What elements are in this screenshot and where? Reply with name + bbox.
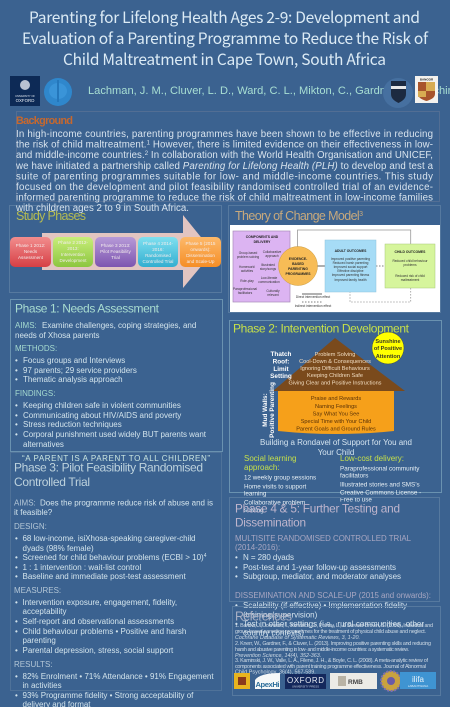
heading: phase 2: Phase 2: Intervention Development: [233, 322, 410, 336]
dissemination: •: [235, 601, 238, 610]
mud walls: Special Time with Your Child: [301, 419, 371, 425]
measures: [14, 586, 186, 655]
components box: Role-play: [240, 279, 254, 283]
methods: 97 parents; 29 service providers: [23, 366, 137, 375]
logo: yellow emblem: [234, 673, 250, 689]
design: [14, 522, 207, 581]
multisite trial: •: [235, 563, 238, 572]
phase 4: Controlled Trial: [143, 259, 173, 264]
components box: Homework/: [239, 265, 255, 269]
measures: Parental depression, stress, social support: [22, 646, 174, 655]
logo: ApexHi: ApexHi: [256, 680, 280, 689]
diagram legend: Direct intervention effect: [296, 295, 330, 299]
logo: Oxford University Press: [285, 674, 326, 689]
methods: [15, 344, 137, 384]
components box: approach: [265, 254, 279, 258]
logo: ilifa labantwana: LABANTWANA: [408, 684, 428, 688]
background text: However, there is limited evidence on their effectiveness in low-: [150, 140, 433, 150]
aims: AIMS: Does the programme reduce risk of abuse and is: [14, 498, 213, 508]
components box: Low-literate: [261, 276, 277, 280]
diagram: theory of change: [230, 225, 440, 312]
panel: phase 2 intervention development: [230, 320, 442, 504]
phase 1: Assessment: [18, 255, 44, 260]
measures: •: [15, 598, 18, 607]
components box: relevant: [267, 293, 279, 297]
low-cost delivery: Illustrated stories and SMS’s: [340, 482, 420, 488]
methods: METHODS:: [15, 344, 57, 353]
components box: COMPONENTS AND: [246, 235, 279, 239]
design: 4: [204, 553, 207, 559]
heading: phase 3: [14, 460, 203, 489]
background text: suite of parenting programmes suitable for low- and middle-income countries. This study: [16, 172, 433, 182]
heading: theory of change: 3: [359, 211, 363, 218]
heading: study phases: Study Phases: [16, 209, 86, 223]
heading: phase 3: Phase 3: Pilot Feasibility Randomised: [14, 460, 203, 474]
caption: Your Child: [318, 448, 354, 457]
phase 2: 2013:: [67, 246, 79, 251]
components box: Collaborative: [263, 250, 282, 254]
measures: MEASURES:: [14, 586, 61, 595]
social learning approach: learning: [244, 490, 267, 498]
thatch roof label: Roof:: [273, 358, 289, 366]
overlapped social learning text: Collaborative problem: [244, 500, 305, 506]
phase 3: [95, 237, 136, 267]
mud walls label: [262, 382, 276, 438]
multisite trial: (2014-2016):: [235, 543, 280, 552]
social learning approach: [244, 454, 316, 498]
thatch roof label: [270, 351, 292, 380]
child outcomes box: Reduced child behaviour: [392, 259, 428, 263]
background text: [15, 129, 434, 214]
mud walls label: Mud Walls:: [262, 393, 269, 427]
logo: Oxford University Press: UNIVERSITY PRESS: [292, 684, 319, 688]
panel: theory of change: [228, 206, 440, 312]
phase 4: [138, 237, 178, 267]
heading: phase 4 and 5: Phase 4 & 5: Further Testing and: [235, 502, 400, 516]
social learning approach: Home visits to support: [244, 484, 307, 490]
components box: problem solving: [237, 255, 259, 259]
phase 3: Trial: [111, 255, 120, 260]
reference list: group-based parenting programmes for the treatment of physical child abuse and neglect.: [235, 629, 426, 635]
phase 5: Dissemination: [186, 253, 215, 258]
quote: “A PARENT IS A PARENT TO ALL CHILDREN”: [22, 454, 210, 463]
measures: acceptability: [22, 607, 67, 616]
sunshine: [372, 332, 404, 364]
thatch roof label: Limit: [273, 366, 290, 373]
findings: [15, 389, 207, 449]
design: •: [15, 572, 18, 581]
phase 1: Phase 1 2012:: [16, 243, 45, 248]
logo: Bangor University: [415, 76, 438, 103]
components box: Group-based: [239, 251, 258, 255]
findings: •: [15, 401, 18, 410]
findings: •: [15, 411, 18, 420]
results: in activities: [22, 681, 62, 690]
evidence-based programmes circle: PROGRAMMES: [285, 272, 311, 276]
thatch roof: Giving Clear and Positive Instructions: [289, 380, 382, 386]
components box: Culturally: [266, 289, 280, 293]
heading: phase 4 and 5: Dissemination: [235, 516, 306, 530]
findings: Stress reduction techniques: [23, 420, 122, 429]
aims: needs of Xhosa parents: [15, 331, 100, 340]
background text: with children ages 2 to 9 in South Africa.: [15, 203, 189, 214]
components box: DELIVERY: [254, 240, 271, 244]
mud walls: Praise and Rewards: [311, 396, 361, 402]
panel: phase 1 needs assessment: [10, 300, 222, 452]
thatch roof: Cool-Down & Consequences: [299, 359, 371, 365]
panel: study phases: [10, 206, 222, 292]
overlapped social learning text: solving: [244, 507, 264, 514]
mud walls: Parent Goals and Ground Rules: [296, 426, 376, 432]
low-cost delivery: [340, 454, 421, 504]
dissemination: (training/supervision): [243, 610, 318, 620]
evidence-based programmes circle: [278, 246, 318, 286]
thatch roof label: Thatch: [271, 351, 292, 358]
measures: parenting: [22, 636, 56, 645]
sunshine: Sunshine: [375, 339, 401, 345]
logo: University of Oxford: OXFORD: [16, 98, 34, 103]
child outcomes box: maltreatment: [401, 278, 419, 282]
dissemination: •: [235, 620, 238, 628]
phase 3: Pilot Feasibility: [100, 249, 132, 254]
reference list: Prevention Science, 14(4), 352-363.: [235, 653, 321, 659]
multisite trial: [235, 534, 412, 581]
results: 93% Programme fidelity • Strong acceptability of: [22, 691, 194, 700]
components box: facilitators: [238, 291, 253, 295]
measures: •: [15, 627, 18, 636]
adult outcomes box: Effective discipline: [337, 269, 364, 273]
design: 1 : 1 intervention : wait-list control: [22, 563, 141, 572]
mud walls: Naming Feelings: [315, 404, 357, 410]
logo: ilifa labantwana: [400, 672, 436, 689]
diagram legend: Indirect intervention effect: [295, 304, 331, 308]
low-cost delivery: Paraprofessional community: [340, 466, 420, 472]
phase 4: Randomised: [145, 253, 171, 258]
logo: University of Oxford: UNIVERSITY OF: [15, 94, 35, 98]
mud walls label: Positive Parenting: [269, 382, 276, 438]
phase 4: 2016:: [152, 247, 164, 252]
phase 5: [180, 237, 221, 267]
dissemination: Test in other settings (i.e., rural communities, other: [243, 620, 424, 628]
methods: Thematic analysis approach: [23, 375, 123, 384]
phase 2: [53, 237, 93, 267]
methods: Focus groups and Interviews: [23, 356, 125, 365]
methods: •: [15, 375, 18, 384]
design: •: [15, 563, 18, 572]
reference list: [235, 623, 433, 676]
results: RESULTS:: [14, 660, 53, 669]
social learning approach: Social learning: [244, 454, 296, 463]
adult outcomes box: Reduced harsh parenting: [333, 261, 369, 265]
dissemination: DISSEMINATION AND SCALE-UP (2015 and onwards):: [235, 591, 431, 600]
results: [14, 660, 214, 707]
title: Parenting for Lifelong Health Ages 2-9: Development and: [29, 6, 420, 28]
aims: [15, 321, 196, 340]
logo: Oxford University Press: OXFORD: [287, 676, 324, 685]
evidence-based programmes circle: PARENTING: [288, 267, 308, 271]
heading: background: Background: [16, 115, 73, 127]
phase 1: [10, 237, 51, 267]
panel: references: [232, 606, 440, 696]
multisite trial: MULTISITE RANDOMISED CONTROLLED TRIAL: [235, 534, 412, 543]
heading: phase 1: Phase 1: Needs Assessment: [15, 302, 160, 316]
title: Child Maltreatment in Cape Town, South Africa: [63, 48, 386, 70]
overlapped social learning text: [244, 500, 305, 514]
components box: Paraprofessional: [233, 287, 257, 291]
reference list: Cochrane Database of Systematic Reviews, 3, 1-20.: [235, 635, 360, 641]
phase 4: Phase 4 2014-: [143, 241, 173, 246]
findings: alternatives: [23, 440, 64, 449]
social learning approach: 12 weekly group sessions: [244, 474, 316, 482]
adult outcomes box: Improved social support: [334, 265, 368, 269]
evidence-based programmes circle: EVIDENCE-: [289, 257, 307, 261]
heading: phase 3: Controlled Trial: [14, 475, 90, 489]
logo: ilifa labantwana: ilifa: [412, 675, 425, 684]
dissemination: [235, 591, 431, 638]
low-cost delivery: Free to use: [340, 496, 372, 504]
results: 82% Enrolment • 71% Attendance • 91% Engagement: [22, 672, 214, 681]
evidence-based programmes circle: BASED: [292, 262, 304, 266]
mud walls: [278, 391, 394, 434]
thatch roof: Keeping Children Safe: [307, 373, 363, 379]
findings: FINDINGS:: [15, 389, 55, 398]
thatch roof label: Setting: [270, 373, 292, 380]
background text: In collaboration with the World Health Organisation and UNICEF,: [148, 150, 433, 161]
diagram legend: [295, 295, 331, 308]
low-cost delivery: Low-cost delivery:: [340, 454, 404, 463]
caption: Building a Rondavel of Support for You and: [260, 438, 412, 447]
phase 5: Phase 5 (2015: [186, 241, 216, 246]
diagram: rondavel: [262, 332, 405, 438]
panel: background: [16, 112, 440, 202]
logo: sun emblem: [381, 671, 401, 691]
child outcomes box: Reduced risk of child: [395, 274, 425, 278]
logo: RMB: [330, 673, 377, 689]
findings: •: [15, 430, 18, 439]
sunshine: of Positive: [374, 346, 402, 352]
logo: Bangor University: BANGOR: [420, 78, 434, 82]
aims: [14, 498, 213, 517]
caption: [260, 438, 412, 457]
findings: Keeping children safe in violent communities: [23, 401, 181, 410]
low-cost delivery: facilitators: [340, 472, 368, 480]
low-cost delivery: Creative Commons License -: [340, 490, 421, 496]
background text: and middle-income countries.: [16, 150, 145, 161]
measures: •: [15, 646, 18, 655]
components box: [233, 231, 290, 302]
title: [22, 6, 429, 70]
reference list: components associated with parent training programme effectiveness. Journal of Abnormal: [235, 664, 426, 670]
adult outcomes box: ADULT OUTCOMES: [335, 249, 367, 253]
measures: Intervention exposure, engagement, fidelity,: [22, 598, 177, 607]
panel: phase 3 pilot trial: [10, 452, 222, 707]
results: •: [15, 672, 18, 681]
components box: Illustrated: [261, 263, 275, 267]
logo: University of Cape Town: [383, 78, 413, 108]
thatch roof: Ignoring Difficult Behaviours: [300, 366, 370, 372]
measures: •: [15, 617, 18, 626]
child outcomes box: [385, 244, 435, 288]
adult outcomes box: [325, 240, 376, 292]
methods: •: [15, 356, 18, 365]
dissemination: Scalability (if effective) • Implementation fidelity: [243, 601, 407, 610]
phase 3: Phase 3 2013:: [101, 243, 130, 248]
reference list: 2. Knerr, W., Gardner, F., & Cluver, L. (2013). Improving positive parenting skills and reducing: [235, 641, 431, 647]
findings: Communicating about HIV/AIDS and poverty: [23, 411, 181, 420]
reference list: Child Psychology, 36(4), 567-589.: [235, 670, 316, 676]
dissemination: country contexts): [243, 628, 304, 638]
reference list: 3. Kaminski, J. W., Valle, L. A., Filene, J. H., & Boyle, C. L. (2008). A meta-analytic review of: [235, 658, 428, 664]
child outcomes box: CHILD OUTCOMES: [395, 250, 426, 254]
design: Screened for child behaviour problems (ECBI > 10): [22, 553, 204, 562]
results: •: [15, 691, 18, 700]
thatch roof: Problem Solving: [315, 352, 355, 358]
methods: •: [15, 366, 18, 375]
design: Baseline and immediate post-test assessment: [22, 572, 186, 581]
phase 2: Development: [59, 258, 87, 263]
multisite trial: Post-test and 1-year follow-up assessments: [243, 563, 396, 572]
reference list: harsh and abusive parenting in low- and middle-income countries: a systematic review.: [235, 647, 409, 653]
components box: communication: [258, 280, 280, 284]
phase 5: and Scale-Up: [187, 259, 215, 264]
findings: Corporal punishment used widely BUT parents want: [23, 430, 207, 439]
multisite trial: N = 280 dyads: [243, 553, 294, 562]
multisite trial: Subgroup, mediator, and moderator analyses: [243, 572, 401, 581]
title: Evaluation of a Parenting Programme to Reduce the Risk of: [22, 27, 429, 49]
background text: we have initiated a partnership called Parenting for Lifelong Health (PLH) to develop and test a: [15, 161, 434, 172]
design: DESIGN:: [14, 522, 47, 531]
social learning approach: approach:: [244, 463, 280, 472]
background text: informed parenting programme to reduce the risk of child maltreatment in low-income families: [16, 192, 433, 204]
panel: phase 4 and 5: [230, 498, 440, 638]
background text: focused on the development and pilot feasibility randomised controlled trial of an evidence-: [16, 182, 433, 193]
logo: University of Oxford: [10, 76, 40, 106]
measures: Self-report and observational assessments: [22, 617, 174, 626]
multisite trial: •: [235, 572, 238, 581]
mud walls: Say What You See: [313, 412, 359, 418]
heading: phase 4 and 5: [235, 502, 400, 530]
child outcomes box: problems: [403, 263, 417, 267]
thatch roof: [273, 338, 405, 391]
sunshine: Attention: [376, 354, 401, 360]
phase 2: Intervention: [61, 252, 85, 257]
findings: •: [15, 420, 18, 429]
reference list: 1. Barlow, J., Johnston, I., Kendrick, D., Polnay, L., & Stewart-Brown, S. (2006). Individual and: [235, 623, 433, 629]
arrow: phase timeline: [42, 215, 213, 288]
heading: references: References: [235, 610, 292, 624]
adult outcomes box: Improved parenting fitness: [332, 273, 370, 277]
logo: RMB: RMB: [348, 679, 363, 686]
components box: activities: [241, 269, 254, 273]
components box: story/songs: [260, 267, 277, 271]
flow arrows: [298, 230, 411, 302]
heading: theory of change: Theory of Change Model: [235, 209, 360, 223]
phase 5: onwards):: [190, 247, 211, 252]
multisite trial: •: [235, 553, 238, 562]
aims: it feasible?: [14, 508, 53, 517]
background text: the risk of child maltreatment.: [16, 140, 146, 150]
design: •: [15, 534, 18, 543]
measures: Child behaviour problems • Positive and harsh: [22, 627, 186, 636]
aims: AIMS: Examine challenges, coping strategies, and: [15, 321, 196, 330]
logo: ApexHi: [255, 673, 280, 689]
background text: In high-income countries, parenting programmes have been shown to be effective in reducing: [16, 129, 433, 140]
background text: 1: [147, 140, 151, 146]
adult outcomes box: Improved positive parenting: [331, 257, 370, 261]
background text: 2: [145, 151, 149, 157]
logo: World Health Organization: [44, 78, 72, 106]
design: •: [15, 553, 18, 562]
phase 2: Phase 2 2012-: [58, 240, 88, 245]
phase 1: Needs: [24, 249, 38, 254]
design: dyads (98% female): [22, 544, 94, 553]
design: 68 low-income, isiXhosa-speaking caregiver-child: [22, 534, 196, 543]
adult outcomes box: Improved family health: [334, 278, 367, 282]
